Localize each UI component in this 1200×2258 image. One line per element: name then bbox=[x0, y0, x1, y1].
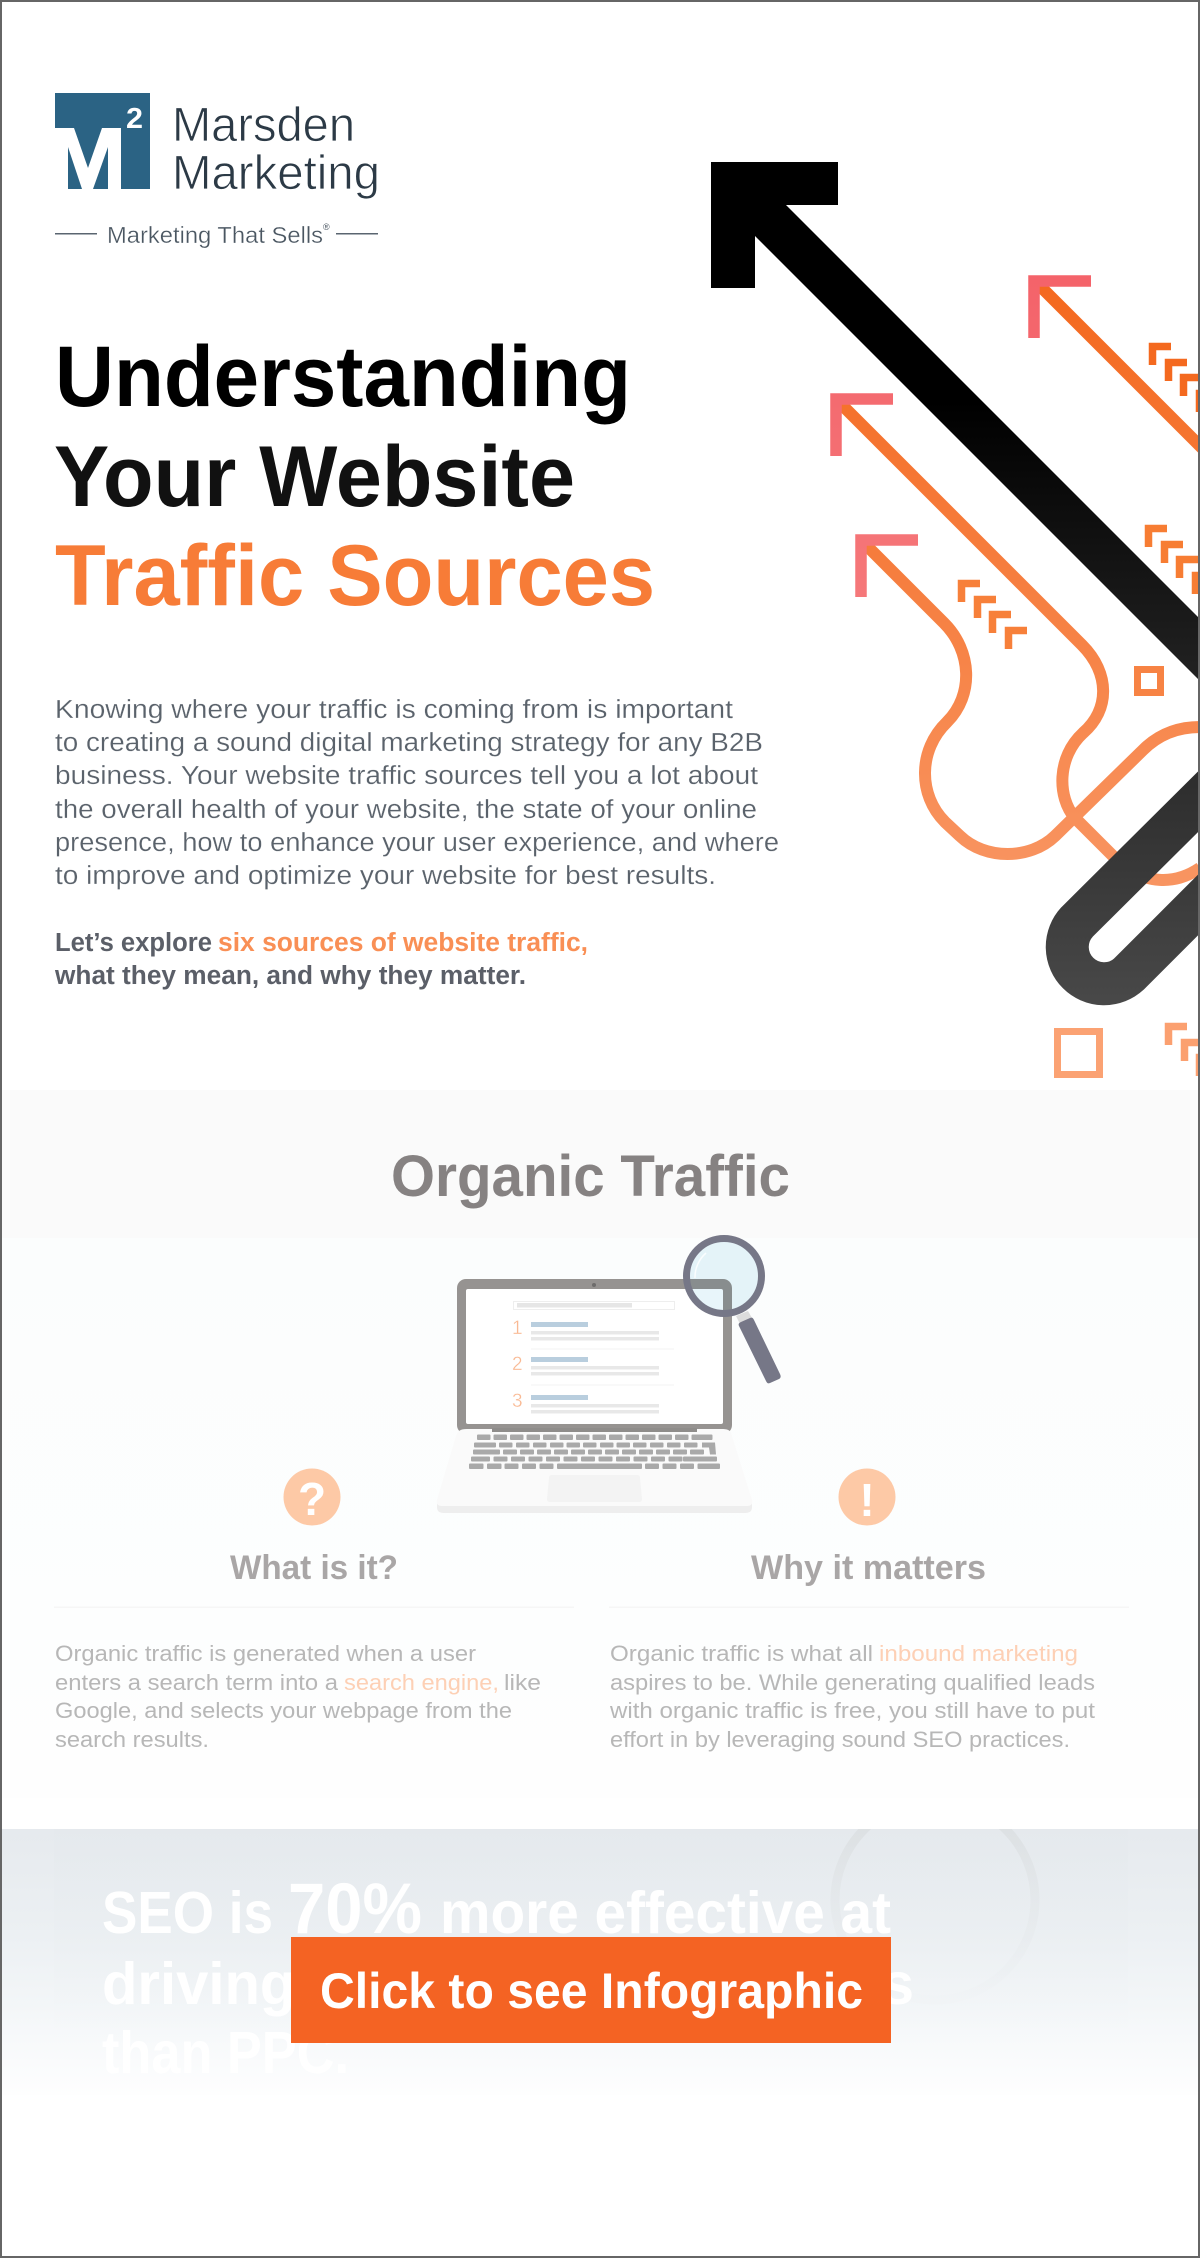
call to action button bbox=[291, 1937, 891, 2043]
heading: why it matters: Why it matters bbox=[751, 1549, 986, 1587]
chevrons group two bbox=[1148, 528, 1200, 594]
body text: why it matters: aspires to be. While generating qualified leads bbox=[610, 1670, 1095, 1695]
body text: why it matters bbox=[609, 1641, 1096, 1752]
intro paragraph: presence, how to enhance your user experience, and where bbox=[55, 829, 779, 857]
body text: why it matters: effort in by leveraging sound SEO practices. bbox=[610, 1727, 1070, 1752]
section background: organic traffic bbox=[0, 1090, 1200, 1798]
banner statistic text: 70% bbox=[288, 1870, 422, 1949]
banner statistic text: driving traffic and more leads bbox=[102, 1951, 914, 2017]
banner statistic text: SEO is bbox=[102, 1880, 273, 1946]
logo mark: 2 bbox=[126, 103, 143, 135]
title: Your Website bbox=[54, 429, 575, 525]
banner background bbox=[0, 1829, 1200, 2095]
logo: Marsden Marketing bbox=[55, 93, 380, 248]
lower orange arrow bbox=[861, 540, 1200, 854]
body text: what is it: enters a search term into a bbox=[55, 1670, 339, 1695]
intro paragraph: to creating a sound digital marketing strategy for any B2B bbox=[55, 729, 763, 757]
title bbox=[54, 329, 655, 624]
icon: question mark: ? bbox=[298, 1473, 326, 1525]
chevrons group four bbox=[1168, 1026, 1200, 1076]
laptop screen: 2 bbox=[512, 1354, 523, 1375]
logo tagline: Marketing That Sells bbox=[107, 222, 323, 248]
intro paragraph: the overall health of your website, the state of your online bbox=[55, 796, 757, 824]
intro paragraph: Knowing where your traffic is coming from is important bbox=[55, 696, 733, 724]
icon: exclamation mark bbox=[838, 1468, 896, 1526]
top orange arrow bbox=[1034, 281, 1200, 451]
intro callout bbox=[54, 929, 588, 990]
dark hairpin band bbox=[1067, 760, 1200, 984]
body text: what is it: Google, and selects your webpage from the bbox=[55, 1698, 512, 1723]
logo wordmark: Marketing bbox=[172, 147, 380, 200]
magnifying glass bbox=[686, 1238, 781, 1383]
banner ring decoration bbox=[844, 1829, 1026, 1850]
laptop screen bbox=[457, 1279, 732, 1434]
icon: question mark bbox=[284, 1468, 340, 1526]
panel: what is it bbox=[54, 1468, 574, 1752]
illustration: laptop with magnifier bbox=[437, 1238, 781, 1513]
intro callout: Let’s explore bbox=[55, 929, 212, 957]
chevrons group three bbox=[962, 584, 1027, 649]
logo wordmark: Marsden bbox=[172, 99, 355, 152]
intro paragraph: to improve and optimize your website for best results. bbox=[55, 862, 716, 890]
title: Traffic Sources bbox=[55, 528, 655, 624]
intro callout: what they mean, and why they matter. bbox=[54, 962, 526, 990]
body text: what is it: Organic traffic is generated when a user bbox=[55, 1641, 477, 1666]
laptop keyboard bbox=[469, 1434, 720, 1469]
logo mark bbox=[55, 93, 150, 189]
small square bbox=[1138, 670, 1160, 692]
body text: what is it: search engine, bbox=[344, 1670, 499, 1695]
icon: exclamation mark: ! bbox=[859, 1474, 875, 1526]
stat banner bbox=[2, 1829, 1198, 2038]
logo wordmark bbox=[172, 99, 380, 200]
intro paragraph: business. Your website traffic sources tell you a lot about bbox=[55, 762, 758, 790]
decorative arrows graphic bbox=[711, 162, 1200, 1076]
call to action button: Click to see Infographic bbox=[320, 1963, 863, 2019]
laptop screen: 3 bbox=[512, 1391, 523, 1412]
middle orange arrow bbox=[836, 399, 1200, 880]
body text: what is it: like bbox=[504, 1670, 541, 1695]
body text: why it matters: Organic traffic is what all bbox=[610, 1641, 873, 1666]
intro paragraph bbox=[55, 696, 779, 890]
large black arrow bbox=[711, 162, 1200, 686]
body text: why it matters: inbound marketing bbox=[879, 1641, 1078, 1666]
banner inner panel bbox=[54, 1829, 1128, 2040]
banner statistic text bbox=[102, 1870, 914, 2086]
title: Understanding bbox=[55, 329, 631, 425]
body text: what is it: search results. bbox=[55, 1727, 209, 1752]
laptop screen: 1 bbox=[512, 1318, 523, 1339]
body text: what is it bbox=[55, 1641, 541, 1752]
large square bbox=[1058, 1032, 1100, 1074]
chevrons group one bbox=[1152, 346, 1200, 412]
panel: why it matters bbox=[609, 1468, 1129, 1752]
banner statistic text: than PPC. bbox=[102, 2020, 349, 2086]
heading: what is it: What is it? bbox=[230, 1549, 398, 1587]
logo tagline bbox=[55, 222, 378, 248]
banner statistic text: more effective at bbox=[440, 1880, 891, 1946]
logo tagline: ® bbox=[323, 222, 330, 232]
heading: Organic Traffic: Organic Traffic bbox=[391, 1144, 790, 1209]
body text: why it matters: with organic traffic is free, you still have to put bbox=[609, 1698, 1096, 1723]
intro callout: six sources of website traffic, bbox=[218, 929, 588, 957]
laptop base bbox=[437, 1428, 752, 1513]
